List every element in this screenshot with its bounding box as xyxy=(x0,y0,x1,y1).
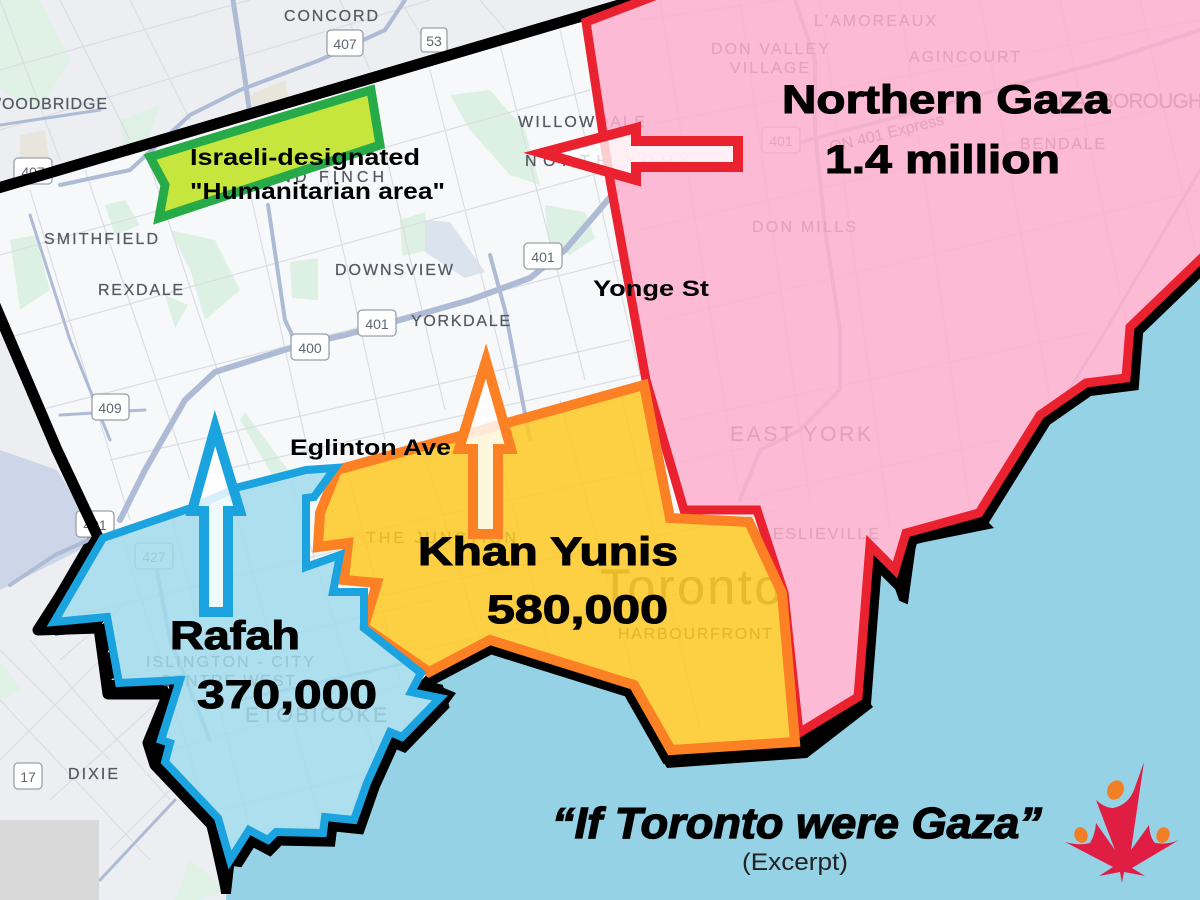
place labels: ETOBICOKE xyxy=(245,704,387,727)
place labels: DOWNSVIEW xyxy=(335,262,454,279)
place labels: ON 401 Express xyxy=(828,112,946,156)
highway shields: 407 xyxy=(21,164,45,180)
highway shields: 401 xyxy=(365,316,389,332)
label: Northern Gaza: Northern Gaza xyxy=(782,78,1111,122)
highway shields: 401 xyxy=(769,133,793,149)
highway shields: 400 xyxy=(298,340,322,356)
place labels: LESLIEVILLE xyxy=(762,526,879,543)
highway shields: 401 xyxy=(531,249,555,265)
lake water xyxy=(226,258,1200,900)
highway shields: 409 xyxy=(98,400,122,416)
label: Rafah: 370,000 xyxy=(197,673,377,717)
label: Northern Gaza xyxy=(782,78,1111,182)
highway shields: 53 xyxy=(426,33,442,49)
airport xyxy=(425,220,485,278)
label: Rafah: Rafah xyxy=(170,614,300,658)
label: humanitarian area: "Humanitarian area" xyxy=(190,178,445,204)
black boundary redraw over map xyxy=(0,0,650,888)
place labels: BENDALE xyxy=(1020,136,1105,153)
region: Khan Yunis xyxy=(318,385,795,750)
region: Northern Gaza xyxy=(586,0,1200,733)
highway shields: 401 xyxy=(83,517,107,533)
place labels: CENTRE WEST xyxy=(160,673,295,690)
arrow: north from Rafah xyxy=(192,428,240,612)
place labels: DIXIE xyxy=(68,766,118,783)
title: “If Toronto were Gaza” xyxy=(552,799,1042,848)
subtitle: (Excerpt) xyxy=(742,849,848,876)
street grid xyxy=(0,0,754,860)
label: Northern Gaza: 1.4 million xyxy=(825,138,1060,182)
place labels: CONCORD xyxy=(284,8,378,25)
place labels: DON MILLS xyxy=(752,219,856,236)
place labels: SCARBOROUGH xyxy=(1045,90,1200,113)
place labels: VILLAGE xyxy=(730,60,809,77)
place labels: REXDALE xyxy=(98,282,183,299)
label: Yonge St: Yonge St xyxy=(593,276,710,301)
label: Eglinton Ave: Eglinton Ave xyxy=(290,435,451,460)
place labels: DON VALLEY xyxy=(711,41,829,58)
label: humanitarian area: Israeli-designated xyxy=(190,144,420,170)
highway shields: 17 xyxy=(20,769,36,785)
place labels: HARBOURFRONT xyxy=(618,626,772,643)
label: Rafah xyxy=(170,614,377,717)
label: Khan Yunis xyxy=(418,530,678,632)
highway shields xyxy=(14,28,800,789)
place labels: THE JUNCTION xyxy=(366,530,516,547)
place labels: EAST YORK xyxy=(730,423,871,446)
place labels: NORTH YORK xyxy=(525,153,690,170)
highway shields: 427 xyxy=(142,549,166,565)
highway shields: 407 xyxy=(333,36,357,52)
place labels: AGINCOURT xyxy=(909,49,1020,66)
place labels: L'AMOREAUX xyxy=(814,13,936,30)
region: Rafah xyxy=(54,468,440,860)
place labels: JANE AND FINCH xyxy=(200,169,384,186)
label: humanitarian area xyxy=(190,144,445,204)
place labels: SMITHFIELD xyxy=(44,231,158,248)
icon: maple leaf logo xyxy=(1065,762,1179,883)
label: Khan Yunis: 580,000 xyxy=(487,588,668,632)
parks xyxy=(10,90,595,480)
label: Khan Yunis: Khan Yunis xyxy=(418,530,678,574)
arrow: north from Northern Gaza xyxy=(542,128,738,180)
region: humanitarian area xyxy=(150,90,380,218)
place labels: WILLOWDALE xyxy=(518,114,645,131)
place labels: YORKDALE xyxy=(411,313,510,330)
place labels: Toronto xyxy=(600,559,782,615)
grey corner box xyxy=(0,820,99,900)
place labels: ISLINGTON - CITY xyxy=(146,654,314,671)
arrow: north from Khan Yunis xyxy=(459,361,511,534)
